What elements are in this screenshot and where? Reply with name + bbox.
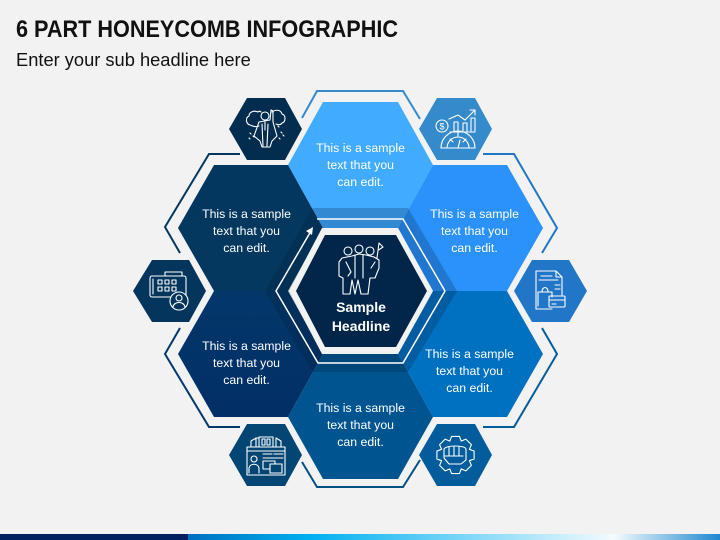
subtitle: Enter your sub headline here bbox=[16, 49, 251, 70]
text: lower left: text that you bbox=[213, 356, 280, 370]
hexagon: upper right bbox=[398, 165, 543, 291]
hexagon: lower right bbox=[398, 291, 543, 417]
icon badge: gear and fist bbox=[419, 424, 492, 486]
icon badge: finance gauge bbox=[419, 98, 492, 160]
title: 6 PART HONEYCOMB INFOGRAPHIC bbox=[16, 17, 398, 43]
bracket: bottom bbox=[302, 460, 420, 487]
icon badge: document bbox=[514, 260, 587, 322]
text: upper left: can edit. bbox=[223, 241, 270, 255]
central hexagon: Headline bbox=[332, 318, 390, 334]
text: lower right: text that you bbox=[436, 364, 503, 378]
footer bar bbox=[0, 534, 720, 540]
honeycomb hexagons bbox=[178, 102, 543, 479]
outline brackets bbox=[165, 91, 557, 487]
text: lower left: can edit. bbox=[223, 373, 270, 387]
icon badge: finance gauge: $ bbox=[439, 122, 445, 132]
centre headline: Sample bbox=[336, 299, 386, 315]
text: bottom: This is a sample bbox=[316, 401, 405, 415]
text: top: This is a sample bbox=[316, 141, 405, 155]
icon badge: cloud person bbox=[229, 98, 302, 160]
bracket: lower right bbox=[483, 328, 557, 427]
text: upper left: text that you bbox=[213, 224, 280, 238]
text: bottom: can edit. bbox=[337, 435, 384, 449]
hexagon: bottom bbox=[288, 354, 433, 479]
text: upper right: This is a sample bbox=[430, 207, 519, 221]
icon badge: news browser bbox=[229, 424, 302, 486]
arrow ring around centre bbox=[276, 219, 445, 363]
icon badge: calendar user bbox=[133, 260, 206, 322]
text: bottom: text that you bbox=[327, 418, 394, 432]
text: lower left: This is a sample bbox=[202, 339, 291, 353]
bracket: lower left bbox=[165, 328, 240, 427]
text: upper left: This is a sample bbox=[202, 207, 291, 221]
central hexagon bbox=[289, 228, 433, 354]
text: lower right: This is a sample bbox=[425, 347, 514, 361]
bracket: upper right bbox=[483, 154, 557, 253]
text: top: text that you bbox=[327, 158, 394, 172]
hexagon: lower left bbox=[178, 291, 323, 417]
text: upper right: text that you bbox=[441, 224, 508, 238]
text: top: can edit. bbox=[337, 175, 384, 189]
darker central ring overlay bbox=[265, 208, 457, 372]
icon: team with flag bbox=[339, 243, 383, 294]
bracket: top bbox=[302, 91, 420, 119]
hexagon: top bbox=[288, 102, 433, 228]
bracket: upper left bbox=[165, 154, 240, 253]
text: upper right: can edit. bbox=[451, 241, 498, 255]
text: lower right: can edit. bbox=[446, 381, 493, 395]
hexagon: upper left bbox=[178, 165, 323, 291]
